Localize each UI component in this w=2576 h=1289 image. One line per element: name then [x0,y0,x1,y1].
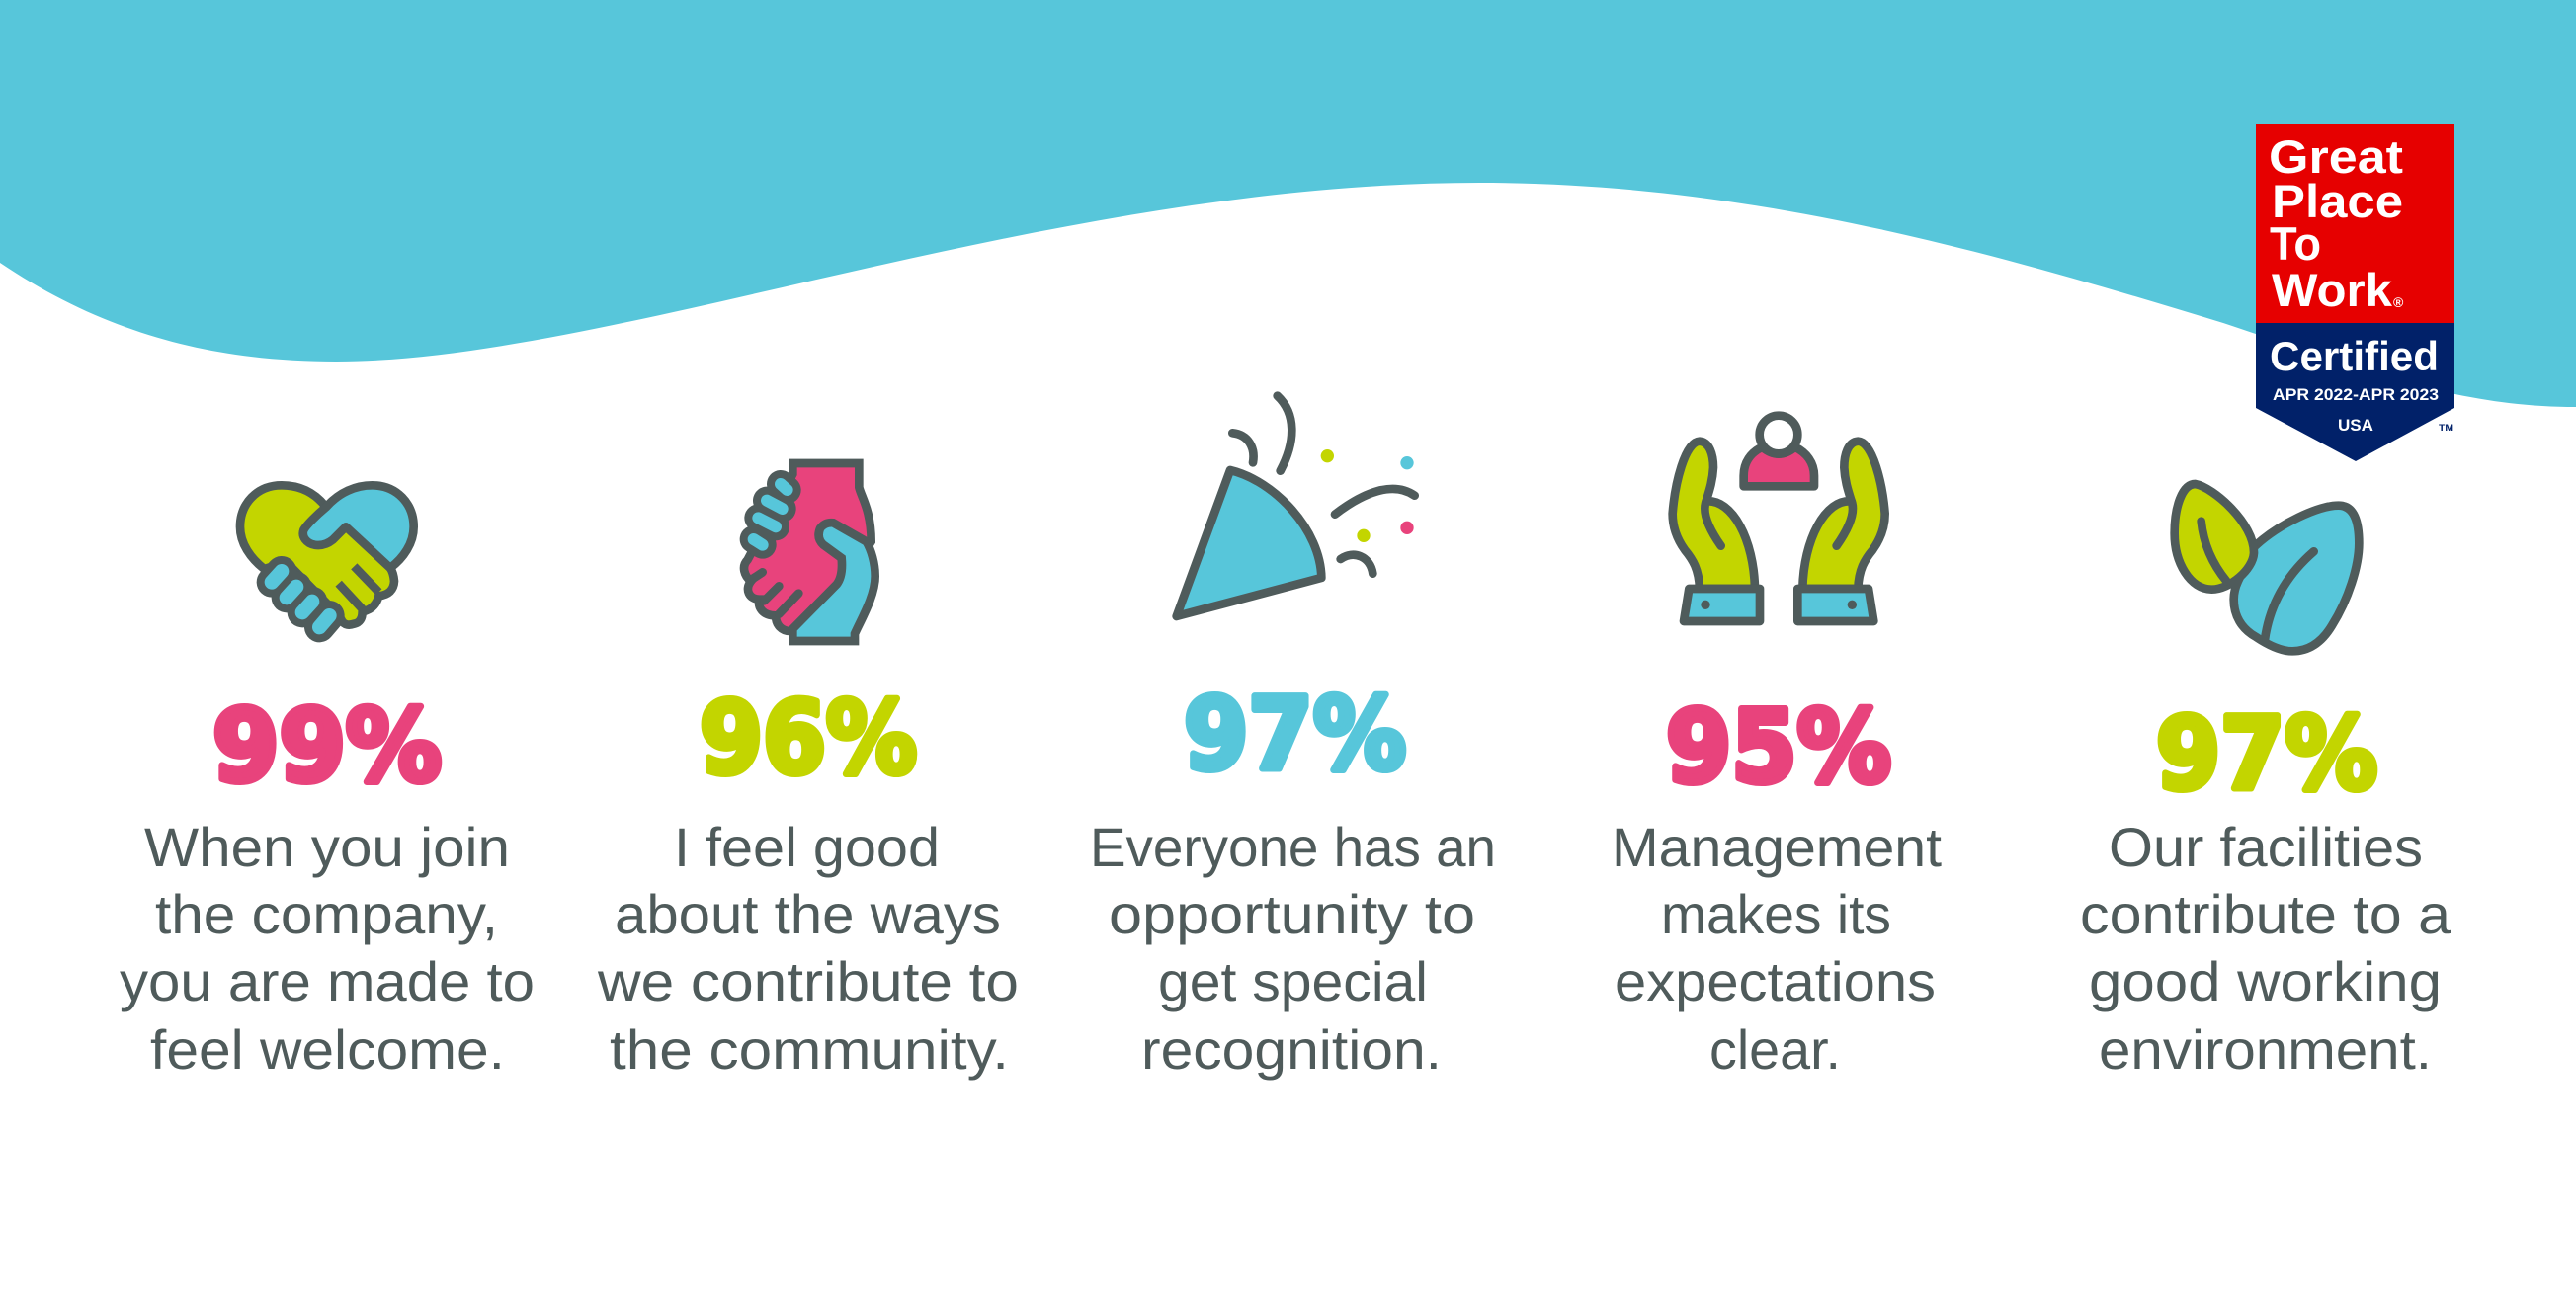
panel: facilities [2080,484,2451,1081]
badge dates: APR 2022-APR 2023 [2273,385,2439,404]
badge heading: To [2270,217,2321,270]
text: facilities statement: environment. [2099,1018,2432,1081]
text: recognition statement: get special [1158,950,1428,1012]
icon: party popper [1177,396,1415,616]
icon: hands around person [1673,416,1885,621]
text: facilities statement: contribute to a [2080,883,2451,945]
badge trademark: TM [2439,423,2453,433]
text: recognition statement: Everyone has an [1090,816,1496,878]
text: welcome statement: When you join [144,816,510,878]
text: expectations statement: expectations [1615,950,1936,1012]
badge country: USA [2338,416,2373,435]
icon: handshake heart [240,485,414,627]
text: recognition statement: recognition. [1141,1018,1442,1081]
badge heading: Work [2272,264,2393,316]
badge: Great Place To Work certified [2256,124,2454,461]
text: facilities statement: Our facilities [2109,816,2423,878]
text: expectations statement: makes its [1661,883,1891,945]
text: expectations statement: clear. [1709,1018,1841,1081]
badge certified label: Certified [2270,333,2439,379]
badge heading: Place [2272,175,2403,227]
stat: 99%: 99% [212,687,442,804]
stat: 96%: 96% [700,680,917,796]
badge heading: Great [2269,130,2403,183]
icon: helping hands [744,463,875,641]
text: welcome statement: the company, [155,883,498,945]
text: recognition statement [1090,816,1496,1081]
text: facilities statement: good working [2089,950,2442,1012]
stat: 97%: 97% [2156,695,2377,812]
badge red panel [2256,124,2454,323]
badge navy pennant [2256,296,2454,461]
panel: recognition [1090,396,1496,1081]
icon: leaves [2175,484,2359,651]
panel: community [597,463,1019,1081]
text: recognition statement: opportunity to [1109,883,1475,945]
panel: expectations [1612,416,1942,1081]
text: welcome statement: feel welcome. [150,1018,505,1081]
stat: 97%: 97% [1184,676,1406,792]
text: community statement: the community. [610,1018,1009,1081]
text: community statement: we contribute to [597,950,1019,1012]
text: facilities statement [2080,816,2451,1081]
badge heading [2269,130,2403,316]
stat: 95%: 95% [1666,688,1891,805]
badge registered mark: ® [2393,294,2404,310]
text: expectations statement [1612,816,1942,1081]
text: community statement: I feel good [674,816,940,878]
text: community statement [597,816,1019,1081]
text: welcome statement: you are made to [120,950,535,1012]
text: community statement: about the ways [615,883,1001,945]
wave header background [0,0,2576,407]
panel: welcome [120,485,535,1081]
text: expectations statement: Management [1612,816,1942,878]
text: welcome statement [120,816,535,1081]
